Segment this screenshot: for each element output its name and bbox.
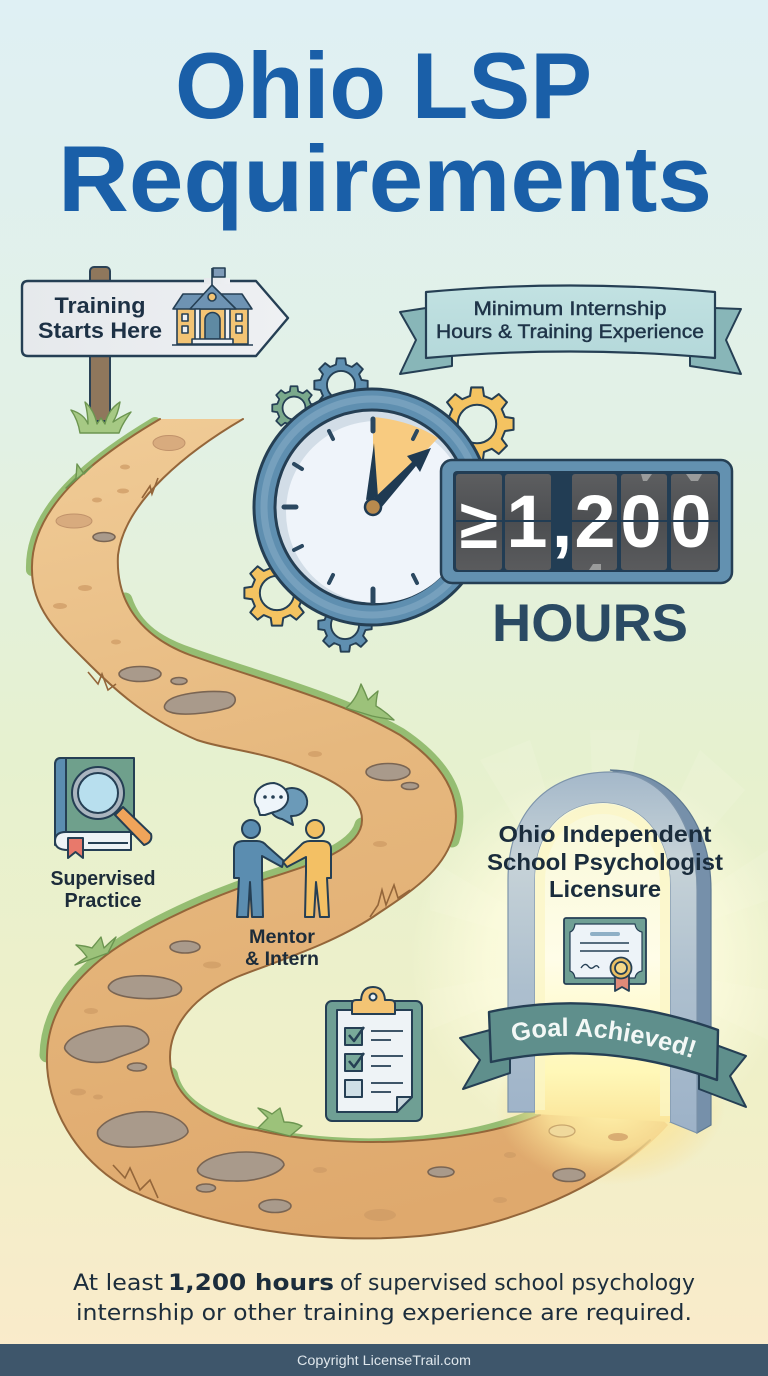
goal achieved banner	[459, 1002, 747, 1108]
goal glow and rays	[410, 730, 768, 1150]
arch opening	[535, 803, 670, 1122]
mentor and intern label: & Intern	[245, 949, 319, 970]
clock face	[275, 410, 469, 604]
icon: checklist clipboard	[326, 987, 422, 1121]
icon: mentor and intern	[234, 783, 331, 917]
mentor and intern label: Mentor	[249, 927, 316, 948]
signpost	[22, 267, 288, 433]
licensure heading	[487, 821, 723, 902]
arch right side face	[610, 770, 711, 1133]
tile scuff marks	[589, 474, 702, 570]
summary text: internship or other training experience are required.	[76, 1301, 692, 1326]
summary text: 1,200 hours	[168, 1271, 334, 1296]
flip counter: 1,200	[441, 460, 732, 583]
counter digits: ≥	[460, 485, 498, 563]
road surface	[32, 419, 668, 1238]
counter digits: 1	[506, 480, 548, 563]
title: Ohio LSP	[175, 33, 592, 138]
flip tiles	[456, 474, 718, 570]
counter digits: 2	[574, 480, 616, 563]
icon: school building	[172, 268, 253, 345]
road edge lines	[32, 419, 650, 1238]
icon: certificate	[564, 918, 646, 991]
mentor figure	[242, 820, 260, 838]
footer bar	[0, 1344, 768, 1376]
grass tufts	[66, 464, 394, 1136]
ribbon tails	[400, 308, 741, 374]
winding path	[32, 419, 725, 1238]
sign text: Training	[54, 293, 146, 318]
licensure heading: Licensure	[549, 876, 661, 902]
arch inner glow	[540, 809, 665, 1116]
summary text: of supervised school psychology	[340, 1271, 695, 1296]
banner body	[489, 1003, 718, 1080]
banner tails	[460, 1030, 746, 1107]
licensure heading: School Psychologist	[487, 849, 723, 875]
floor glow on road near arch	[495, 1025, 725, 1185]
banner text: Goal Achieved!	[512, 1018, 696, 1058]
ribbon text: Hours & Training Experience	[436, 321, 704, 343]
path fringe marks	[88, 478, 410, 1198]
licensure heading: Ohio Independent	[498, 821, 712, 847]
intern figure	[306, 820, 324, 838]
counter casing	[441, 460, 732, 583]
summary text	[73, 1271, 695, 1326]
clock ring	[254, 389, 490, 625]
highlighted wedge	[373, 417, 438, 507]
supervised practice label	[50, 868, 156, 912]
ribbon: minimum internship	[400, 286, 741, 374]
summary text: At least	[73, 1271, 163, 1296]
ribbon text: Minimum Internship	[474, 298, 667, 320]
counter digits: ,	[552, 480, 572, 563]
counter digits	[460, 480, 712, 563]
clock hub	[365, 499, 381, 515]
counter digits: 0	[670, 480, 712, 563]
clock with gears	[244, 358, 514, 652]
arch front	[508, 772, 697, 1133]
road spots	[53, 464, 628, 1221]
stones	[65, 532, 585, 1212]
speech bubbles	[270, 788, 307, 825]
goal archway	[508, 770, 711, 1133]
clock hands	[366, 443, 431, 514]
sign text: Starts Here	[38, 318, 162, 343]
post	[90, 267, 110, 421]
light stones upper path	[56, 436, 185, 528]
pale stone by arch	[549, 1125, 575, 1137]
ribbon body	[426, 286, 715, 358]
supervised practice label: Supervised	[50, 868, 156, 890]
footer copyright: Copyright LicenseTrail.com	[297, 1353, 471, 1368]
grass edges of the path	[32, 423, 540, 1146]
sign board	[22, 281, 288, 356]
counter digits: 0	[620, 480, 662, 563]
tick marks	[284, 419, 417, 602]
title: Requirements	[58, 126, 712, 231]
flip split line	[456, 520, 718, 522]
gears	[244, 358, 514, 652]
ribbon text	[436, 298, 704, 343]
title	[58, 33, 712, 231]
icon: supervised practice book	[55, 758, 151, 858]
grass at post base	[71, 402, 131, 433]
sign text	[38, 293, 162, 343]
hours label: HOURS	[492, 594, 688, 653]
supervised practice label: Practice	[64, 890, 142, 912]
mentor and intern label	[245, 927, 319, 970]
